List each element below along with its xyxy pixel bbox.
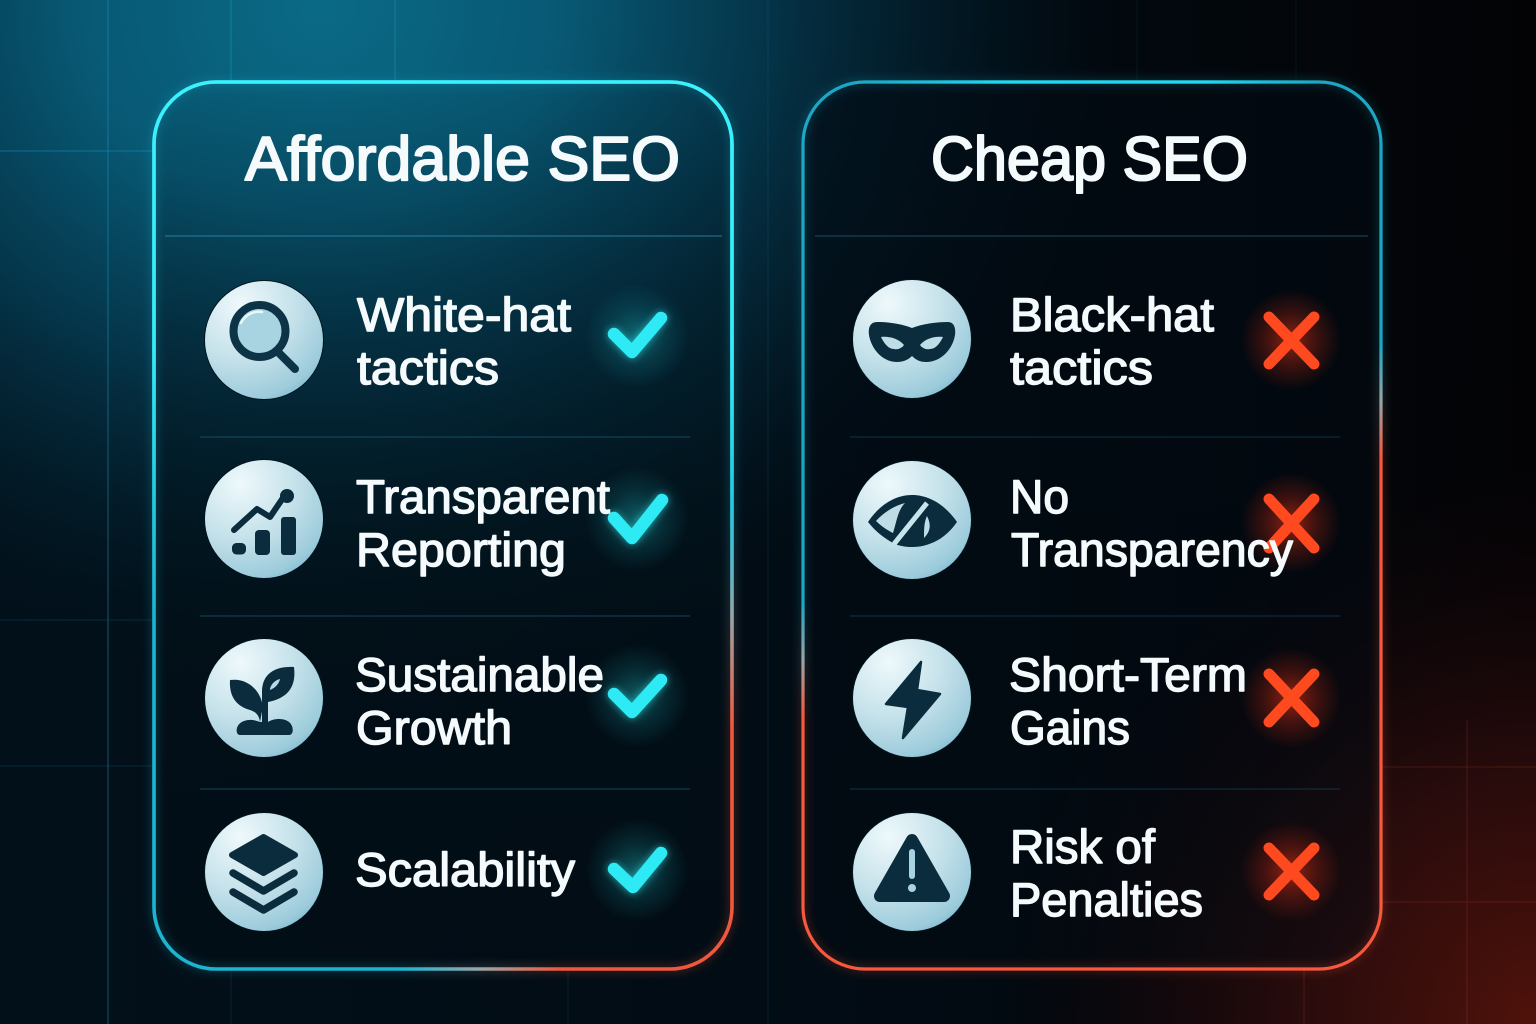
bright frame accent (154, 82, 732, 620)
label (355, 648, 604, 754)
row: White-hat tactics (204, 280, 689, 400)
label: White-hat (357, 288, 571, 341)
label (1009, 648, 1247, 754)
row: Black-hat tactics (852, 279, 1341, 399)
label (1010, 288, 1214, 394)
icon: sprout (204, 638, 324, 758)
row: Scalability (204, 812, 689, 932)
check mark (585, 644, 689, 748)
bright top edge (860, 80, 1320, 84)
label: No (1010, 470, 1069, 523)
label: Risk of (1010, 820, 1156, 873)
panel: Cheap SEO (803, 82, 1381, 969)
heading: Affordable SEO (245, 125, 680, 194)
icon: lightning bolt (852, 638, 972, 758)
cross mark (1241, 290, 1341, 390)
panel fill (803, 82, 1381, 969)
cross mark (1241, 473, 1341, 573)
icon: crossed eye (852, 460, 972, 580)
cross mark (1241, 821, 1341, 921)
check mark (585, 467, 689, 571)
check mark (585, 284, 689, 388)
icon: mask (852, 279, 972, 399)
label: tactics (1010, 341, 1153, 394)
label: Gains (1010, 701, 1130, 754)
icon: growth chart (204, 459, 324, 579)
panel frame (154, 82, 732, 969)
row: Risk of Penalties (852, 812, 1341, 932)
label: tactics (357, 341, 499, 394)
icon: magnifier (204, 280, 324, 400)
row: No Transparency (852, 460, 1341, 580)
label: Short-Term (1009, 648, 1247, 701)
row: Transparent Reporting (204, 459, 689, 579)
label (1010, 470, 1293, 576)
label: Scalability (355, 843, 576, 896)
label (1010, 820, 1203, 926)
label (357, 288, 571, 394)
label: Transparency (1011, 523, 1293, 576)
row: Short-Term Gains (852, 638, 1341, 758)
cross mark (1241, 648, 1341, 748)
label: Sustainable (355, 648, 604, 701)
label: Penalties (1010, 873, 1203, 926)
icon: warning triangle (852, 812, 972, 932)
label: Transparent (356, 470, 610, 523)
panel fill (154, 82, 732, 969)
panel frame (803, 82, 1381, 969)
panel: Affordable SEO (154, 82, 732, 969)
label: Growth (356, 701, 512, 754)
heading: Cheap SEO (931, 125, 1248, 194)
icon: layers (204, 812, 324, 932)
row: Sustainable Growth (204, 638, 689, 758)
label: Black-hat (1010, 288, 1214, 341)
label: Reporting (356, 523, 566, 576)
check mark (585, 818, 689, 922)
label (356, 470, 610, 576)
